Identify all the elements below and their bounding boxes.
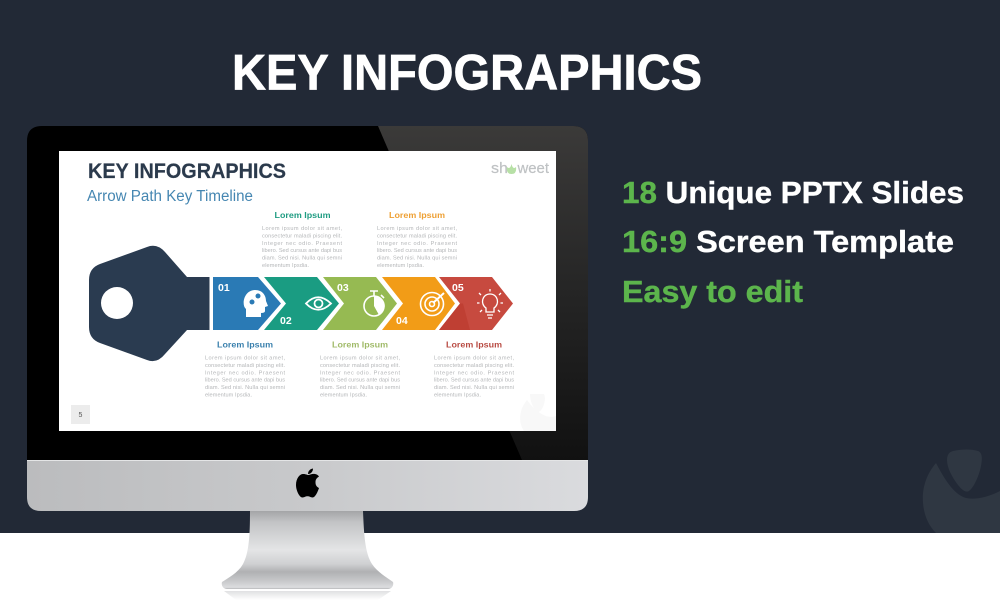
text block: blue: Integer nec odio. Praesent <box>205 370 285 376</box>
arrow 04 <box>382 277 455 330</box>
icon: light bulb <box>477 289 503 318</box>
slide panel <box>59 151 556 431</box>
watermark logo <box>923 450 1000 533</box>
text block: red: Integer nec odio. Praesent <box>434 370 514 376</box>
showeet logo: weet <box>517 160 550 177</box>
monitor stand <box>222 511 393 600</box>
icon: stopwatch <box>364 291 385 316</box>
text block: green: consectetur maladi piscing elit. <box>320 363 400 369</box>
slide title: KEY INFOGRAPHICS <box>88 159 286 183</box>
text block: orange <box>377 210 457 269</box>
main title: KEY INFOGRAPHICS <box>232 44 702 100</box>
feature: slides: 18 Unique PPTX Slides <box>622 175 964 210</box>
text block: red <box>434 340 514 398</box>
text block: green: libero. Sed cursus ante dapi bus <box>320 378 400 384</box>
text block: blue: elementum Ipsdia. <box>205 392 252 398</box>
text block: green: Lorem ipsum dolor sit amet, <box>320 356 400 362</box>
text block: green: Lorem Ipsum <box>332 340 388 350</box>
arrow 04: 04 <box>396 315 408 327</box>
text block: teal: elementum Ipsdia. <box>262 263 309 269</box>
text block: blue: consectetur maladi piscing elit. <box>205 363 285 369</box>
slide watermark <box>520 394 556 431</box>
apple logo <box>296 468 319 498</box>
feature: screen: 16:9 Screen Template <box>622 224 954 259</box>
monitor body <box>27 126 588 511</box>
arrow 02: 02 <box>280 315 292 327</box>
text block: teal: Lorem ipsum dolor sit amet, <box>262 226 342 232</box>
text block: blue: diam. Sed nisi. Nulla qui semni <box>205 385 285 391</box>
text block: red: consectetur maladi piscing elit. <box>434 363 514 369</box>
text block: green: Integer nec odio. Praesent <box>320 370 400 376</box>
arrow 05 <box>439 277 513 330</box>
key head <box>89 246 210 361</box>
showeet logo: sh <box>491 160 508 177</box>
text block: orange: libero. Sed cursus ante dapi bus <box>377 248 457 254</box>
text block: red: elementum Ipsdia. <box>434 392 481 398</box>
text block: teal: Integer nec odio. Praesent <box>262 241 342 247</box>
text block: orange: diam. Sed nisi. Nulla qui semni <box>377 256 457 262</box>
text block: red: Lorem ipsum dolor sit amet, <box>434 356 514 362</box>
icon: eye <box>306 297 331 310</box>
arrow 02 <box>264 277 339 330</box>
arrow timeline <box>213 277 513 330</box>
arrow 03 <box>323 277 397 330</box>
text block: green: diam. Sed nisi. Nulla qui semni <box>320 385 400 391</box>
text block: teal: libero. Sed cursus ante dapi bus <box>262 248 342 254</box>
arrow 05: 05 <box>452 282 464 294</box>
text block: orange: Integer nec odio. Praesent <box>377 241 457 247</box>
text block: orange: Lorem ipsum dolor sit amet, <box>377 226 457 232</box>
text block: blue: Lorem ipsum dolor sit amet, <box>205 356 285 362</box>
arrow 01 <box>213 277 281 330</box>
text block: teal: consectetur maladi piscing elit. <box>262 234 342 240</box>
page number <box>71 405 90 424</box>
feature list <box>622 175 964 309</box>
text block: teal: Lorem Ipsum <box>274 210 331 220</box>
text block: orange: Lorem Ipsum <box>389 210 445 220</box>
icon: target <box>420 292 444 316</box>
icon: head with gears <box>244 290 268 317</box>
text block: red: diam. Sed nisi. Nulla qui semni <box>434 385 514 391</box>
arrow 01: 01 <box>218 282 230 294</box>
arrow 03: 03 <box>337 282 349 294</box>
text block: teal <box>262 210 342 269</box>
slide subtitle: Arrow Path Key Timeline <box>87 188 253 205</box>
text block: green <box>320 340 400 398</box>
feature: easy: Easy to edit <box>622 274 803 309</box>
text block: blue <box>205 340 285 398</box>
text block: orange: elementum Ipsdia. <box>377 263 424 269</box>
text block: blue: Lorem Ipsum <box>217 340 273 350</box>
showeet logo <box>491 160 550 177</box>
page number: 5 <box>78 412 82 419</box>
text block: green: elementum Ipsdia. <box>320 392 367 398</box>
text block: red: Lorem Ipsum <box>446 340 502 350</box>
text block: orange: consectetur maladi piscing elit. <box>377 234 457 240</box>
text block: blue: libero. Sed cursus ante dapi bus <box>205 378 285 384</box>
text block: teal: diam. Sed nisi. Nulla qui semni <box>262 256 342 262</box>
text block: red: libero. Sed cursus ante dapi bus <box>434 378 514 384</box>
